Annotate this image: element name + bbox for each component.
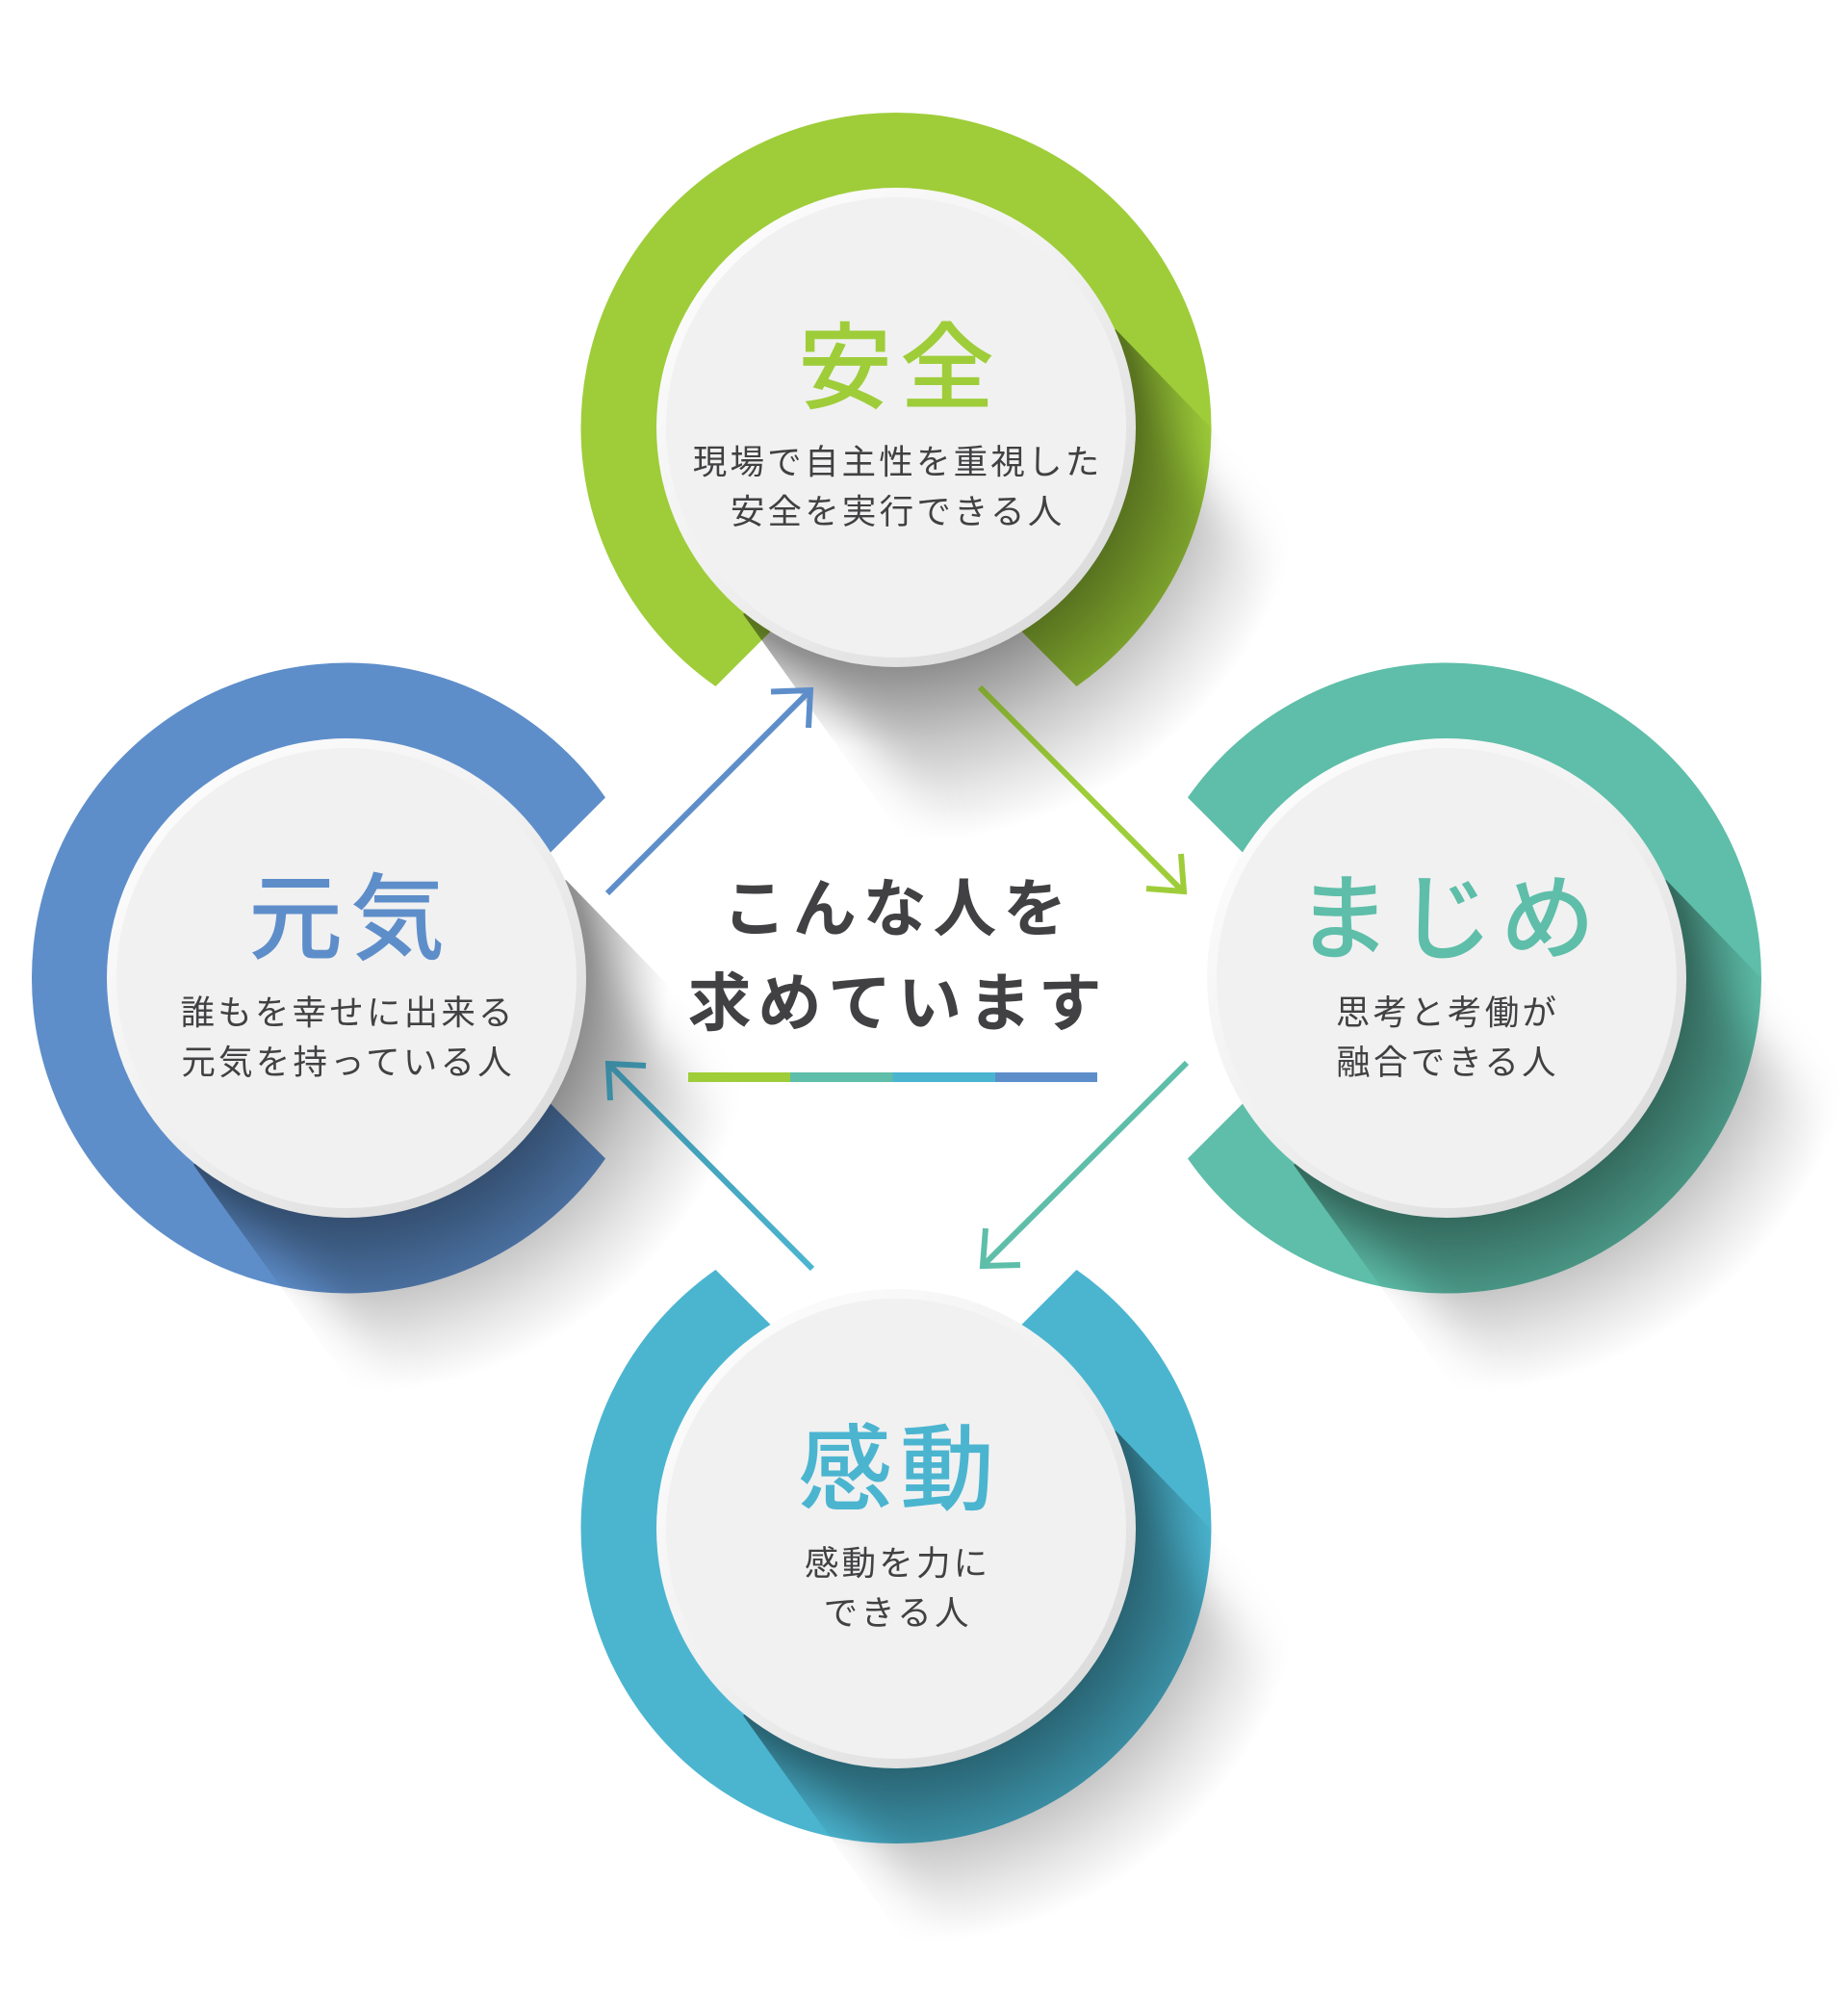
ring: teal [1188, 662, 1761, 1294]
text: description line 2: 安全を実行できる人 [731, 493, 1065, 531]
arrow: cyan to left [608, 1064, 812, 1269]
ring shadow [1294, 880, 1759, 1294]
text: description line 2: 融合できる人 [1336, 1044, 1559, 1082]
ring: blue [32, 662, 605, 1294]
disc [1207, 738, 1686, 1218]
ring: green [580, 113, 1211, 686]
panel: 安全 [581, 113, 1211, 686]
panel: 元気 [32, 662, 605, 1294]
cast shadows [193, 329, 1846, 2010]
panel: まじめ [1188, 662, 1761, 1294]
heading: 安全: 安全 [798, 316, 1002, 422]
ring shadow [743, 329, 1211, 686]
disc [107, 738, 586, 1218]
title [688, 873, 1108, 1039]
text: description: 感動を力に [805, 1544, 990, 1583]
title line 1: こんな人を [723, 873, 1073, 944]
ring: cyan [581, 1270, 1211, 1843]
arrow: green to right [980, 687, 1184, 891]
panel: 感動 [581, 1270, 1211, 1843]
disc [656, 188, 1136, 667]
arrow: blue to top [607, 690, 810, 893]
text: description line 2: 元気を持っている人 [181, 1044, 515, 1082]
disc [656, 1289, 1136, 1768]
ring shadow [193, 1103, 605, 1294]
heading: まじめ: まじめ [1296, 866, 1603, 972]
colour bar [688, 1072, 1097, 1082]
ring shadow [743, 1431, 1211, 1843]
heading: 感動: 感動 [798, 1417, 1002, 1523]
title line 2: 求めています [688, 967, 1108, 1039]
text: description: 現場で自主性を重視した [693, 443, 1102, 481]
heading: 元気: 元気 [248, 866, 452, 972]
text: description: 誰もを幸せに出来る [180, 993, 516, 1032]
arrow: teal to bottom [983, 1063, 1187, 1266]
text: description line 2: できる人 [824, 1594, 972, 1633]
text: description: 思考と考働が [1336, 993, 1559, 1032]
